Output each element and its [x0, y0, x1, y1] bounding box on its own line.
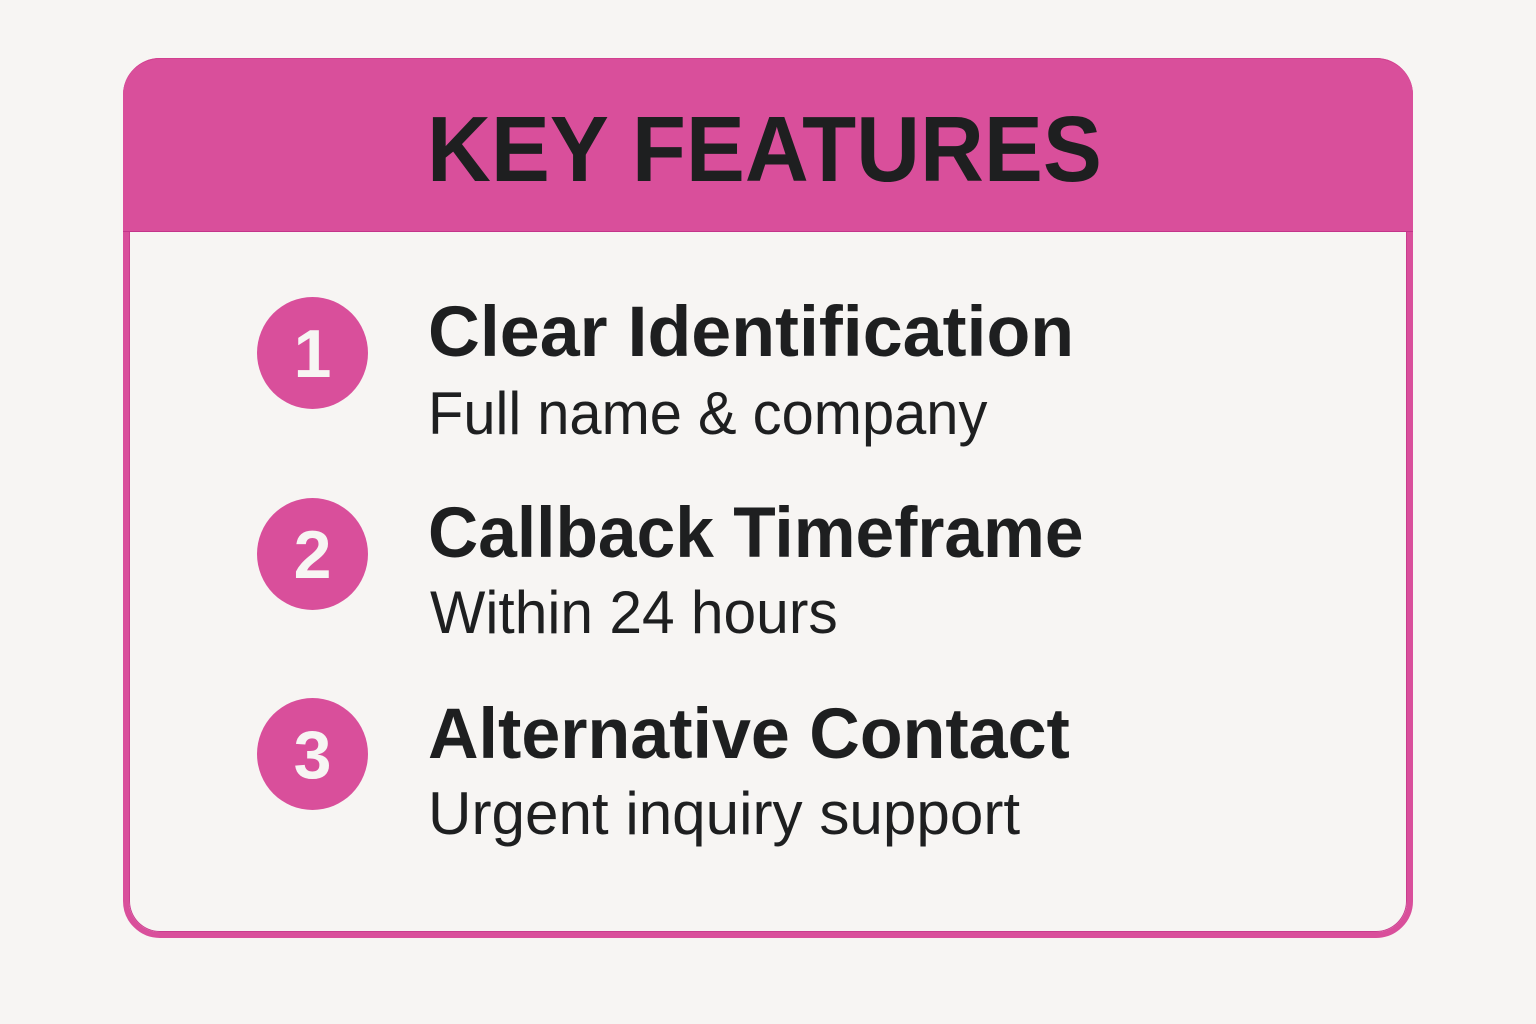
heading: callback timeframe: Callback Timeframe	[428, 494, 1084, 573]
heading: clear identification: Clear Identification	[428, 293, 1074, 372]
icon: number 3: 3	[294, 717, 331, 793]
panel: key features card	[123, 58, 1413, 938]
icon: number 3	[257, 698, 368, 810]
icon: number 1	[257, 297, 368, 409]
icon: number 2	[257, 498, 368, 610]
text: within 24 hours: Within 24 hours	[430, 579, 838, 646]
header band	[123, 58, 1413, 232]
icon: number 2: 2	[294, 517, 331, 593]
icon: number 1: 1	[294, 316, 331, 392]
text: urgent inquiry support: Urgent inquiry support	[428, 780, 1020, 847]
title: KEY FEATURES	[427, 97, 1102, 201]
heading: alternative contact: Alternative Contact	[428, 695, 1070, 774]
text: full name and company: Full name & company	[428, 380, 987, 447]
